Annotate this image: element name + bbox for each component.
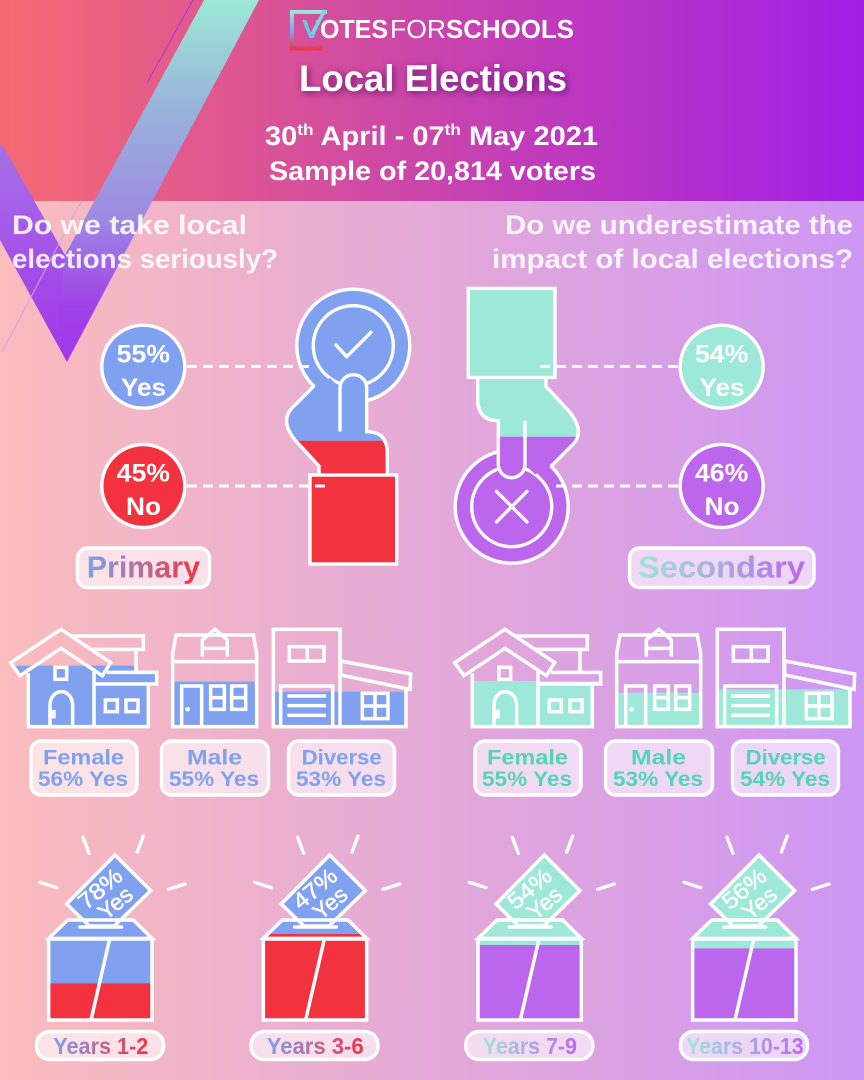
ballot box: years 3-6: 47%	[287, 862, 342, 914]
label: female secondary: Female	[487, 746, 568, 770]
stat: secondary no 46%: No	[704, 493, 740, 521]
label: female secondary: 55% Yes	[482, 767, 572, 791]
logo: VotesForSchools: SCHOOLS	[446, 14, 574, 44]
question: secondary: Do we underestimate the	[505, 210, 853, 240]
label: years 1-2: Years 1-2	[53, 1033, 148, 1059]
logo: VotesForSchools: OTES	[320, 14, 388, 44]
label: female primary: Female	[43, 746, 124, 770]
stat: primary yes 55%: Yes	[121, 374, 166, 402]
question: primary	[12, 210, 278, 274]
ballot box: years 1-2	[40, 836, 185, 1020]
date range: th	[297, 122, 314, 139]
ballot box: years 7-9: Yes	[522, 881, 567, 925]
label: diverse secondary	[732, 741, 838, 795]
stat: primary no 45%: No	[126, 493, 161, 521]
header band	[0, 0, 864, 201]
question: primary: Do we take local	[12, 210, 247, 240]
label: Secondary: Secondary	[638, 550, 806, 585]
label: female primary	[31, 741, 137, 795]
label: male secondary: 53% Yes	[613, 767, 703, 791]
label: diverse secondary: Diverse	[746, 746, 826, 770]
label: years 3-6: Years 3-6	[267, 1033, 364, 1059]
stat: primary no 45%: 45%	[117, 460, 170, 488]
question: secondary	[492, 210, 853, 274]
decorative V shape	[0, 0, 259, 362]
label: diverse primary	[288, 741, 394, 795]
ballot box: years 1-2: 78%	[73, 862, 128, 914]
house: female primary	[11, 629, 157, 727]
panel: secondary gender houses	[455, 629, 855, 727]
stat: secondary yes 54%	[680, 325, 763, 408]
stat: secondary no 46%: 46%	[695, 460, 748, 488]
logo: VotesForSchools	[292, 10, 574, 48]
stat: primary yes 55%	[102, 325, 185, 408]
ballot box: years 3-6	[255, 836, 400, 1020]
stat: secondary no 46%	[680, 444, 763, 528]
label: male primary: 55% Yes	[169, 767, 259, 791]
label: years 7-9: Years 7-9	[483, 1033, 577, 1059]
date range: April - 07	[314, 121, 445, 151]
panel: primary gender houses	[11, 629, 411, 727]
label: Primary: Primary	[87, 550, 201, 585]
panel: ballot boxes	[40, 836, 829, 1020]
label: diverse primary: 53% Yes	[296, 767, 386, 791]
ballot box: years 10-13	[684, 836, 829, 1020]
ballot box: years 10-13: 56%	[716, 862, 772, 914]
house: diverse primary	[273, 629, 411, 727]
ballot box: years 7-9: 54%	[502, 862, 557, 914]
title: Local Elections	[299, 58, 567, 99]
question: secondary: impact of local elections?	[492, 244, 853, 274]
date range: May 2021	[461, 121, 598, 151]
ballot box: years 1-2: Yes	[93, 881, 138, 925]
label: female secondary	[475, 741, 581, 795]
label: male primary	[162, 741, 268, 795]
label: male secondary	[606, 741, 712, 795]
label: diverse secondary: 54% Yes	[740, 767, 830, 791]
label: female primary: 56% Yes	[38, 767, 128, 791]
label: years 10-13: Years 10-13	[686, 1033, 804, 1059]
icon: hand pressing cross button	[455, 288, 578, 563]
ballot box: years 7-9	[469, 836, 614, 1020]
house: male secondary	[617, 629, 701, 727]
question: primary: elections seriously?	[12, 244, 278, 274]
stat: secondary yes 54%: Yes	[700, 374, 744, 402]
sample size: Sample of 20,814 voters	[269, 156, 596, 186]
label: male secondary: Male	[631, 746, 686, 770]
logo: VotesForSchools: FOR	[390, 14, 446, 44]
date range: 30	[265, 121, 295, 151]
house: male primary	[173, 629, 257, 727]
ballot box: years 3-6: Yes	[307, 881, 352, 925]
house: female secondary	[455, 629, 601, 727]
stat: primary yes 55%: 55%	[117, 341, 170, 369]
stat: secondary yes 54%: 54%	[695, 341, 748, 369]
icon: hand pressing check button	[287, 289, 410, 564]
stat: primary no 45%	[102, 444, 185, 528]
house: diverse secondary	[717, 629, 855, 727]
date range: th	[445, 122, 461, 139]
ballot box: years 10-13: Yes	[736, 881, 782, 925]
label: diverse primary: Diverse	[302, 746, 382, 770]
logo: VotesForSchools: V	[302, 14, 322, 44]
label: male primary: Male	[187, 746, 242, 770]
